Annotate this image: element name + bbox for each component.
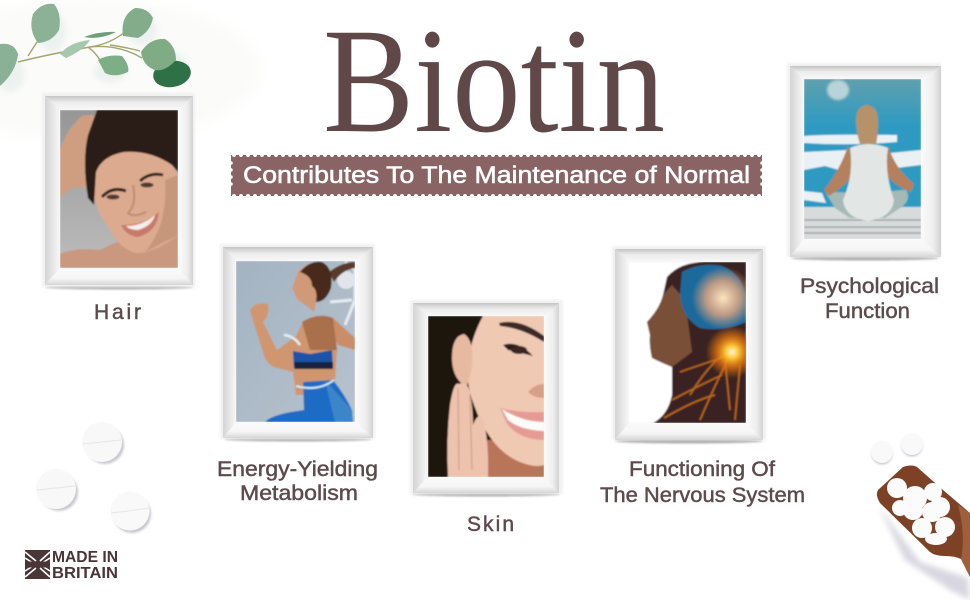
logo text: BRITAIN xyxy=(52,565,118,582)
frame: nervous system xyxy=(612,246,766,444)
icon: union flag xyxy=(25,550,50,579)
frame: hair xyxy=(42,93,195,290)
label: functioning of the nervous system: Functioning Of xyxy=(629,458,775,481)
photo: running woman xyxy=(236,261,355,422)
label: energy-yielding metabolism: Metabolism xyxy=(240,482,358,505)
photo: meditating woman xyxy=(804,79,921,239)
banner text: Contributes To The Maintenance of Normal xyxy=(243,162,750,189)
frame: psychological function xyxy=(787,63,941,260)
photo: smiling man xyxy=(60,110,178,268)
logo text: MADE IN xyxy=(52,549,118,566)
label: psychological function xyxy=(800,275,939,323)
icon: wooden scoop with tablets xyxy=(871,433,970,600)
label: functioning of the nervous system xyxy=(600,458,805,507)
label: psychological function: Function xyxy=(825,300,910,323)
icon: eucalyptus branch xyxy=(0,4,193,92)
frame: skin xyxy=(410,300,563,496)
label: energy-yielding metabolism: Energy-Yielding xyxy=(217,458,378,481)
label: functioning of the nervous system: The Nervous System xyxy=(600,484,805,507)
logo: made in britain xyxy=(25,549,118,582)
label: hair: Hair xyxy=(94,301,141,324)
title: Biotin xyxy=(323,0,665,164)
label: skin: Skin xyxy=(467,513,514,536)
banner xyxy=(231,155,762,196)
label: energy-yielding metabolism xyxy=(217,458,378,505)
frame: energy metabolism xyxy=(220,244,375,442)
icon: three tablets xyxy=(36,422,151,533)
photo: woman's face xyxy=(428,316,544,477)
photo: head with glowing brain xyxy=(629,262,758,423)
logo text xyxy=(52,549,118,582)
label: psychological function: Psychological xyxy=(800,275,939,298)
